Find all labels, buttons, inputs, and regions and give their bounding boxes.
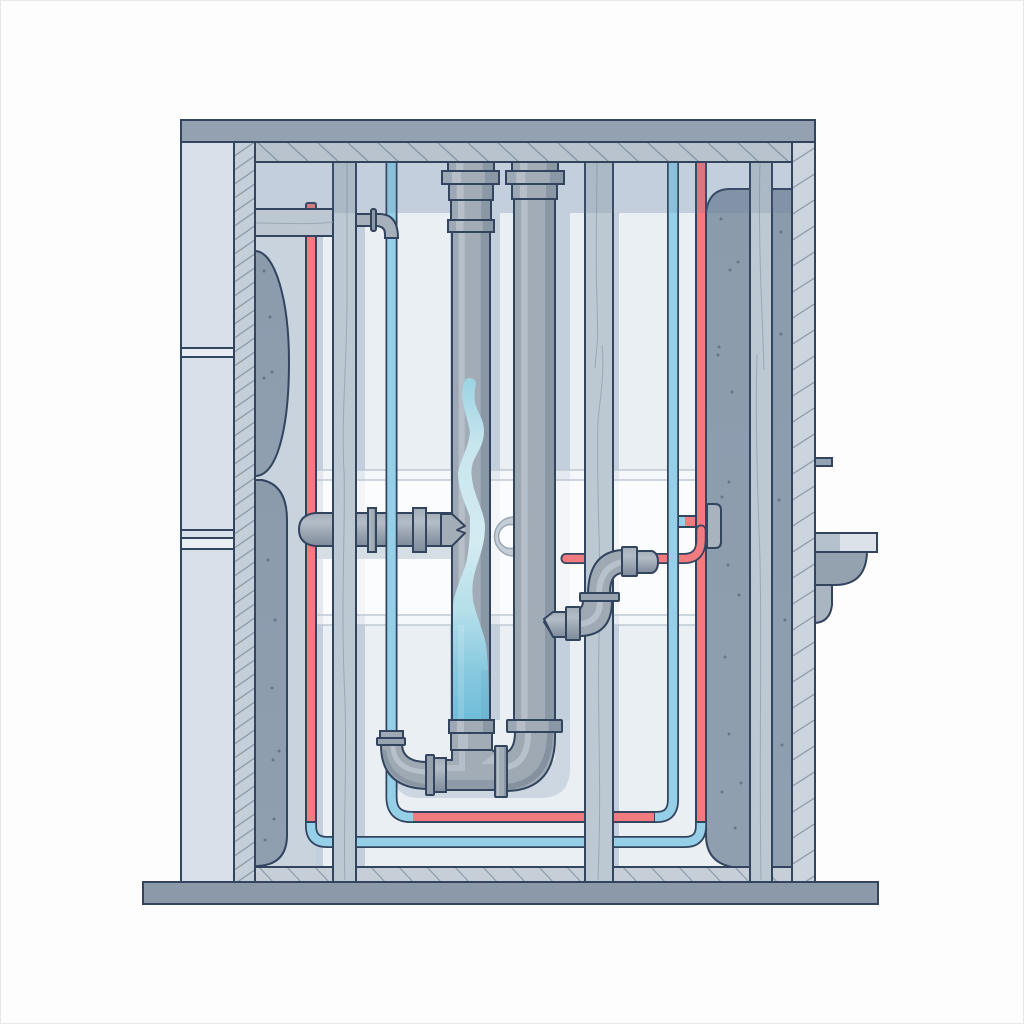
cold water: inner loop fill [392,162,673,817]
drain stack B [506,162,564,720]
left blocking beam [255,209,333,236]
top beam [181,120,815,142]
water ribbon and pooled water in stack A [453,378,489,720]
bottom hatched plate [255,867,792,882]
drain stack A [452,232,490,720]
trap shadow [395,720,570,798]
valve knob [707,504,721,548]
ring bracket [494,517,514,556]
right hatched sheathing [792,142,815,882]
top hatched plate [255,142,792,162]
hot water: branch fill [566,530,701,558]
insulation: right batt [706,189,792,867]
hot water: lower horizontal run [410,812,655,822]
hot water supply: left riser [306,203,316,822]
sink drain [815,585,832,623]
insulation: lower left batt [255,480,287,866]
exterior wall panel [181,142,234,882]
cold water: bottom loop [311,822,701,842]
horizontal waste pipe: tapered tip [441,514,465,546]
cross connection branch [676,516,696,527]
cold water: inner loop [392,162,673,817]
wall tap stub [815,458,832,466]
cold water: bottom loop fill [311,823,701,842]
wall cavity [255,162,792,867]
vertical stud 1 [333,162,356,882]
horizontal waste pipe [299,508,453,552]
sink basin [815,552,867,585]
drain stack A: outer edges over water [452,232,490,720]
sink countertop [815,533,877,552]
insulation: upper left batt [255,251,289,476]
vertical stud 2 [585,162,613,882]
cold water connector elbow [356,209,398,238]
tee fitting and horizontal trap [377,720,562,797]
top shadow band [256,163,791,213]
left hatched sheathing [234,142,255,882]
vertical stud 3 [750,162,772,882]
hot water: branch behind elbow [566,530,701,558]
hot water supply: right riser [696,162,706,822]
offset elbow fitting [544,547,658,640]
floor slab [143,882,878,904]
drain stack A: top fitting [442,162,499,232]
